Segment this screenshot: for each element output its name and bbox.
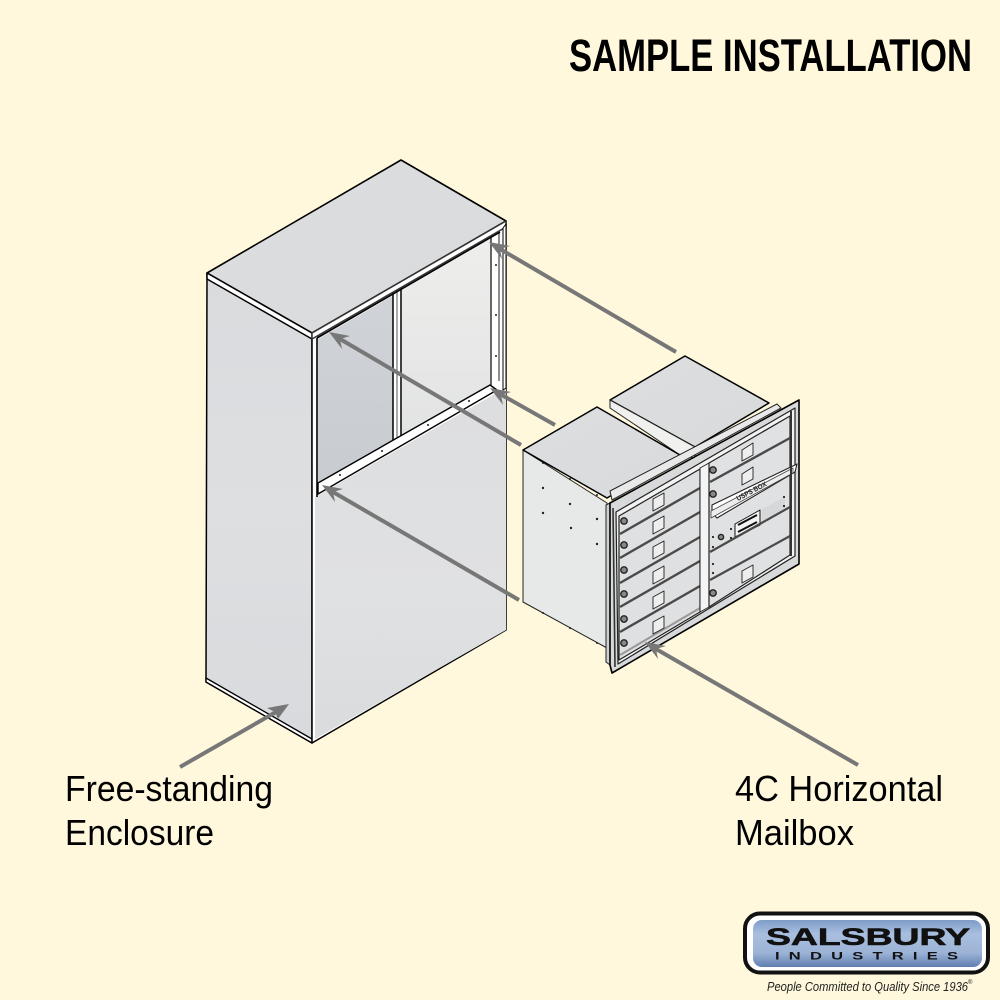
opening: shaded left bay bbox=[318, 295, 394, 483]
left door column bbox=[619, 469, 700, 660]
logo: Salsbury Industries: SALSBURY bbox=[766, 924, 970, 951]
enclosure lower front face bbox=[315, 388, 506, 739]
rear compartment side bbox=[610, 400, 695, 458]
USPS label strip: USPS BOX bbox=[736, 481, 768, 503]
label: mailbox bbox=[735, 768, 943, 853]
frame edge highlights bbox=[790, 411, 792, 556]
front compartment side bbox=[523, 450, 607, 648]
label: enclosure: Enclosure bbox=[65, 812, 214, 853]
left column door windows bbox=[653, 493, 664, 634]
arrow: to mailbox bbox=[645, 642, 858, 765]
enclosure front panel bbox=[312, 221, 506, 743]
label: enclosure bbox=[65, 768, 273, 853]
centre frame post bbox=[700, 463, 709, 612]
right door column bbox=[709, 416, 797, 607]
opening: right bay bbox=[402, 239, 490, 436]
logo tagline: People Committed to Quality Since 1936 bbox=[767, 979, 969, 994]
enclosure top panel bbox=[207, 160, 506, 333]
registered mark: ® bbox=[968, 979, 973, 986]
arrow: to enclosure bbox=[180, 704, 289, 767]
side rivets bbox=[542, 462, 598, 644]
opening: centre divider bbox=[393, 288, 402, 441]
rear compartment top bbox=[610, 356, 769, 447]
arrow: bottom left of opening bbox=[322, 485, 519, 600]
arrow: top left of opening bbox=[329, 332, 521, 445]
enclosure top trim bbox=[207, 273, 312, 339]
master lock plate bbox=[735, 510, 760, 537]
mailbox outer frame bbox=[610, 400, 799, 673]
arrow: top right corner bbox=[489, 242, 676, 352]
top mounting rail bbox=[610, 404, 781, 500]
rear flange with rivets bbox=[606, 503, 610, 665]
right column door windows bbox=[742, 443, 753, 583]
arrow: shelf right bbox=[490, 388, 555, 425]
free-standing enclosure illustration bbox=[206, 160, 506, 743]
right column door locks bbox=[710, 467, 724, 596]
logo: Salsbury Industries bbox=[745, 914, 988, 994]
frame inner bevel bbox=[616, 408, 795, 664]
opening: right flange bbox=[491, 233, 503, 391]
enclosure bottom trim bbox=[206, 678, 312, 743]
right column rivets bbox=[712, 496, 785, 574]
parcel locker divider bbox=[712, 464, 797, 518]
label: mailbox: Mailbox bbox=[735, 812, 854, 853]
4C horizontal mailbox illustration bbox=[523, 356, 799, 673]
label: mailbox: 4C Horizontal bbox=[735, 768, 943, 809]
front compartment top bbox=[523, 407, 680, 498]
opening: lower shelf bbox=[318, 385, 497, 494]
logo: Salsbury Industries: INDUSTRIES bbox=[775, 949, 958, 962]
opening: top edge bbox=[317, 232, 500, 338]
enclosure left side panel bbox=[206, 273, 312, 743]
left column door locks bbox=[621, 518, 627, 646]
label: enclosure: Free-standing bbox=[65, 768, 273, 809]
